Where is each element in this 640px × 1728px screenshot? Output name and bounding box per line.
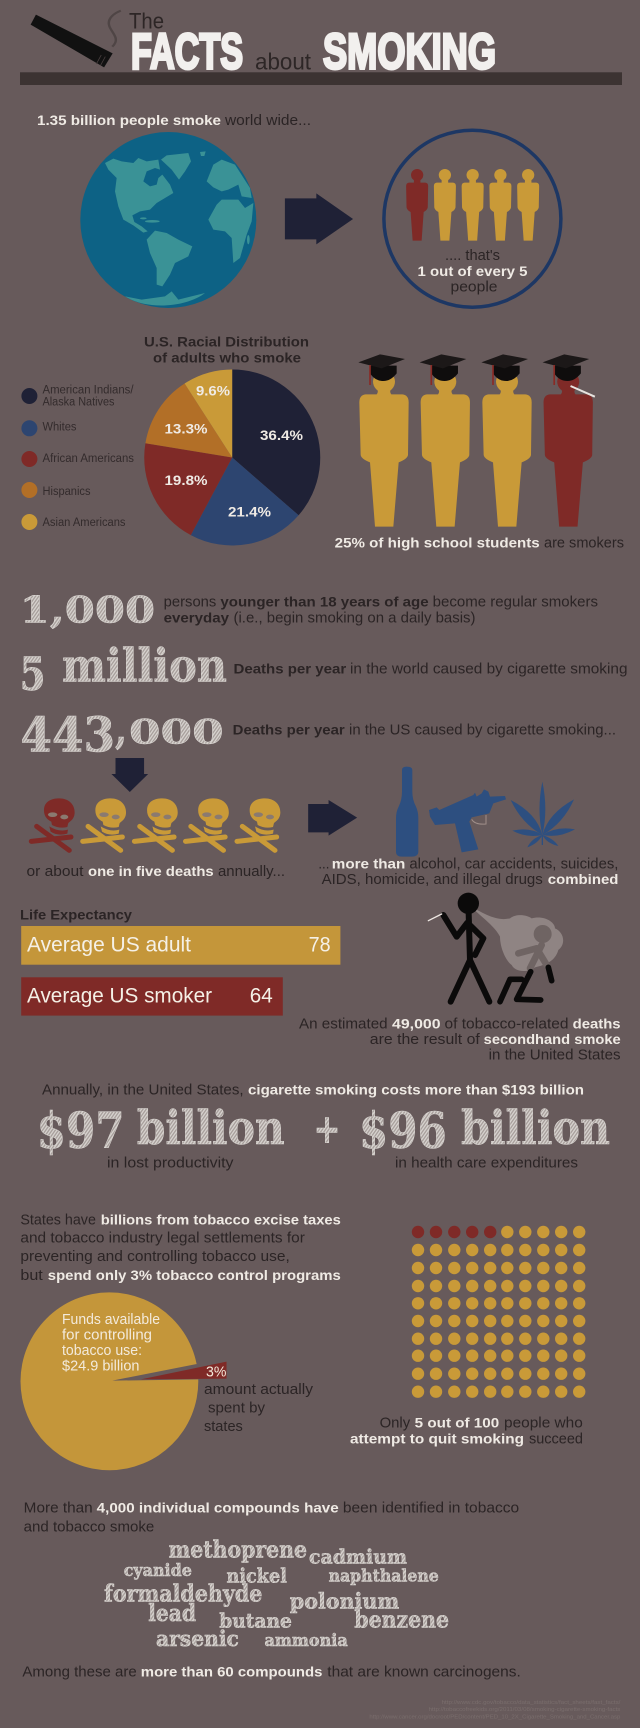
text: more than causes combined: alcohol, car accidents, suicides, (409, 856, 618, 872)
text: secondhand smoke deaths: An estimated (299, 1016, 388, 1032)
arrow: globe to people (285, 193, 353, 244)
text: one in five deaths: annually... (218, 864, 285, 880)
stat: 5 million: million (62, 639, 227, 693)
text: 4,000 compounds: 4,000 individual compounds have (97, 1500, 339, 1516)
text: secondhand smoke deaths: deaths (573, 1015, 621, 1031)
text: state tobacco funds: States have (20, 1212, 96, 1228)
stat: 443,000: 443 (20, 708, 115, 764)
legend: African Americans (42, 453, 134, 465)
text: more than causes combined (318, 855, 618, 888)
stat: $96 billion: billion (461, 1101, 610, 1156)
text: 5 out of 100 succeed: Only (380, 1415, 411, 1431)
text: one in five deaths: one in five deaths (88, 863, 214, 879)
stat: 443,000: , (115, 706, 127, 753)
text: 1.35 billion people smoke: world wide... (224, 113, 311, 129)
word cloud: compounds: polonium (290, 1588, 399, 1613)
chart: funds pie (20, 1292, 314, 1470)
pie label: tobacco use: (62, 1343, 142, 1359)
spent label: states (204, 1419, 243, 1435)
text: carcinogens: that are known carcinogens. (327, 1665, 521, 1681)
word cloud: compounds: arsenic (156, 1626, 239, 1651)
stat: 1,000: younger than 18 years of age (220, 594, 429, 610)
stat: 1,000: everyday (164, 609, 229, 625)
ring (384, 130, 561, 307)
caption: are smokers (544, 535, 624, 551)
bar: average US adult: Average US adult (27, 934, 191, 957)
text: 4,000 compounds: been identified in tobacco (343, 1501, 519, 1517)
sources: http://www.cdc.gov/tobacco/data_statistics/fact_sheets/fast_facts/ (442, 1700, 621, 1706)
icon: cigarette with smoke (31, 11, 121, 67)
bar: average US adult (21, 926, 340, 965)
stat: 1,000 (20, 588, 598, 631)
panel: 1 out of every 5 people (384, 130, 561, 307)
spent label: amount actually (204, 1382, 314, 1398)
stat: 443,000: 000 (129, 712, 224, 752)
text: more than causes combined: more than (332, 855, 405, 871)
word cloud: compounds: cyanide (124, 1561, 192, 1581)
text: carcinogens: Among these are (22, 1665, 137, 1681)
text: 1.35 billion people smoke: 1.35 billion people smoke (37, 112, 221, 128)
heading (144, 334, 309, 365)
text: carcinogens (22, 1664, 521, 1681)
wedge (112, 1362, 227, 1381)
heading: Life Expectancy (20, 906, 132, 922)
word cloud: compounds: butane (219, 1609, 292, 1633)
word cloud: compounds: benzene (354, 1607, 449, 1634)
text: secondhand smoke deaths: of tobacco-related (444, 1016, 568, 1032)
word cloud: compounds: formaldehyde (104, 1581, 262, 1608)
pie chart: 13.3% (164, 420, 208, 436)
text: 5 out of 100 succeed (350, 1414, 583, 1447)
text: more than causes combined: ... (318, 856, 329, 872)
title header (20, 8, 622, 85)
stat: 5 million: Deaths per year (234, 660, 347, 676)
stat: $96 billion: in health care expenditures (395, 1155, 578, 1171)
text: state tobacco funds: and tobacco industry legal settlements for (20, 1231, 305, 1247)
icon: bottle (396, 767, 418, 857)
bar: average US smoker (21, 977, 283, 1016)
text: one in five deaths (26, 863, 285, 880)
icon: five people (406, 169, 539, 241)
heading: The: The (129, 8, 164, 33)
caption: 25% of high school students (335, 534, 540, 550)
legend: American Indians/ (42, 384, 134, 396)
word cloud: compounds: nickel (226, 1563, 287, 1587)
text: secondhand smoke deaths: 49,000 (392, 1015, 441, 1031)
caption: people (450, 280, 498, 296)
heading: cigarette smoking costs more than $193 billion (248, 1081, 584, 1097)
legend: Asian Americans (42, 517, 126, 529)
text: 4,000 compounds (24, 1500, 519, 1536)
pie chart: 36.4% (260, 427, 304, 443)
icon: globe (80, 132, 256, 308)
3% label: 3% (206, 1365, 226, 1381)
sources (369, 1700, 621, 1721)
word cloud: compounds: lead (148, 1600, 196, 1627)
stat: $97 billion (37, 1101, 285, 1171)
text: state tobacco funds (20, 1211, 341, 1284)
pie label: $24.9 billion (62, 1358, 140, 1374)
pie chart: 9.6% (196, 382, 231, 398)
stat: $96 billion: $96 (359, 1101, 447, 1160)
header bar (20, 72, 622, 85)
bar: average US smoker: 64 (250, 985, 273, 1008)
text: 4,000 compounds: and tobacco smoke (24, 1520, 154, 1536)
text: 5 out of 100 succeed: 5 out of 100 (415, 1414, 499, 1430)
text: carcinogens: more than 60 compounds (141, 1664, 323, 1680)
pie chart (144, 370, 320, 545)
pie label: Funds available (62, 1312, 160, 1328)
panel: high school students (335, 354, 624, 551)
icon: bottle, gun, leaf (396, 767, 575, 857)
sources: http://www.cancer.org/docroot/PED/content/PED_10_2X_Cigarette_Smoking_and_Cancer.asp (369, 1715, 621, 1721)
heading (42, 1081, 584, 1098)
text: 1.35 billion people smoke (37, 112, 311, 129)
stat: 1,000: persons (164, 595, 216, 611)
heading: Annually, in the United States, (42, 1082, 244, 1098)
stat: $97 billion: $97 (37, 1101, 125, 1160)
icon: cannabis leaf (511, 782, 575, 847)
pie label: for controlling (62, 1328, 152, 1344)
text: 5 out of 100 succeed: attempt to quit smoking (350, 1430, 524, 1446)
panel: life expectancy (20, 906, 340, 1016)
pie label (62, 1312, 160, 1374)
stat: $97 billion: in lost productivity (107, 1155, 234, 1171)
spent label: spent by (208, 1401, 266, 1417)
word cloud: compounds (104, 1537, 449, 1651)
bar: average US smoker: Average US smoker (27, 985, 212, 1008)
text: 4,000 compounds: More than (24, 1501, 93, 1517)
word cloud: compounds: ammonia (264, 1631, 348, 1651)
text: state tobacco funds: billions from tobacco excise taxes (101, 1211, 341, 1227)
sources: http://tobaccofreekids.org/2011/03/08/smoking-cigarette-smoking-facts (429, 1707, 621, 1713)
caption (335, 534, 624, 551)
text: secondhand smoke deaths: in the United States (489, 1047, 621, 1063)
text: state tobacco funds: preventing and controlling tobacco use, (20, 1249, 290, 1265)
icon: gun (429, 789, 506, 852)
text: 5 out of 100 succeed: succeed (529, 1431, 583, 1447)
stat: $97 billion: billion (137, 1101, 285, 1156)
stat: 5 million: in the world caused by cigarette smoking (350, 661, 628, 677)
legend: Hispanics (42, 486, 91, 498)
caption: 1 out of every 5 (418, 263, 528, 279)
stat: 5 million (20, 639, 628, 701)
arrow: down (111, 758, 148, 792)
text: one in five deaths: or about (26, 864, 84, 880)
pie chart: 21.4% (228, 504, 272, 520)
stat: 5 million: 5 (20, 647, 46, 701)
pie chart: 19.8% (164, 472, 208, 488)
icon: four graduates (358, 354, 595, 527)
text: more than causes combined: combined (548, 871, 618, 887)
chart: 100 dots (412, 1226, 585, 1398)
caption (418, 248, 528, 296)
text: secondhand smoke deaths (299, 1015, 621, 1063)
arrow: skulls to causes (308, 800, 357, 836)
word cloud: compounds: cadmium (309, 1544, 407, 1568)
spent label (204, 1382, 314, 1435)
heading: SMOKING: SMOKING (323, 22, 496, 80)
heading: of adults who smoke (153, 349, 301, 365)
heading: U.S. Racial Distribution (144, 334, 309, 350)
bar: average US adult: 78 (309, 934, 331, 957)
legend: Whites (42, 422, 77, 434)
word cloud: compounds: naphthalene (329, 1567, 439, 1587)
text: 5 out of 100 succeed: people who (504, 1415, 583, 1431)
text: more than causes combined: AIDS, homicide, and illegal drugs (322, 872, 543, 888)
heading: about: about (255, 48, 312, 74)
stat: 1,000: (i.e., begin smoking on a daily basis) (234, 610, 476, 626)
stat: 443,000 (20, 706, 616, 764)
panel: racial distribution (21, 334, 320, 545)
legend (21, 384, 134, 530)
text: state tobacco funds: spend only 3% tobacco control programs (48, 1267, 341, 1283)
caption: .... that's (445, 248, 500, 264)
stat: $96 billion (359, 1101, 610, 1171)
text: state tobacco funds: but (20, 1268, 43, 1284)
legend: Alaska Natives (42, 396, 115, 408)
text: secondhand smoke deaths: secondhand smoke (484, 1031, 621, 1047)
word cloud: compounds: methoprene (169, 1537, 307, 1564)
stat: 1,000: become regular smokers (433, 595, 598, 611)
panel: cost of smoking (37, 1081, 610, 1171)
plus sign: + (314, 1106, 340, 1153)
icon: secondhand smoke figures (428, 893, 563, 1002)
stat: 443,000: Deaths per year (233, 721, 345, 737)
icon: five skulls (31, 798, 280, 850)
stat: 443,000: in the US caused by cigarette smoking... (349, 722, 616, 738)
stat: 1,000: 1,000 (20, 588, 155, 631)
text: secondhand smoke deaths: are the result of (370, 1032, 481, 1048)
heading: FACTS: FACTS (131, 22, 243, 80)
